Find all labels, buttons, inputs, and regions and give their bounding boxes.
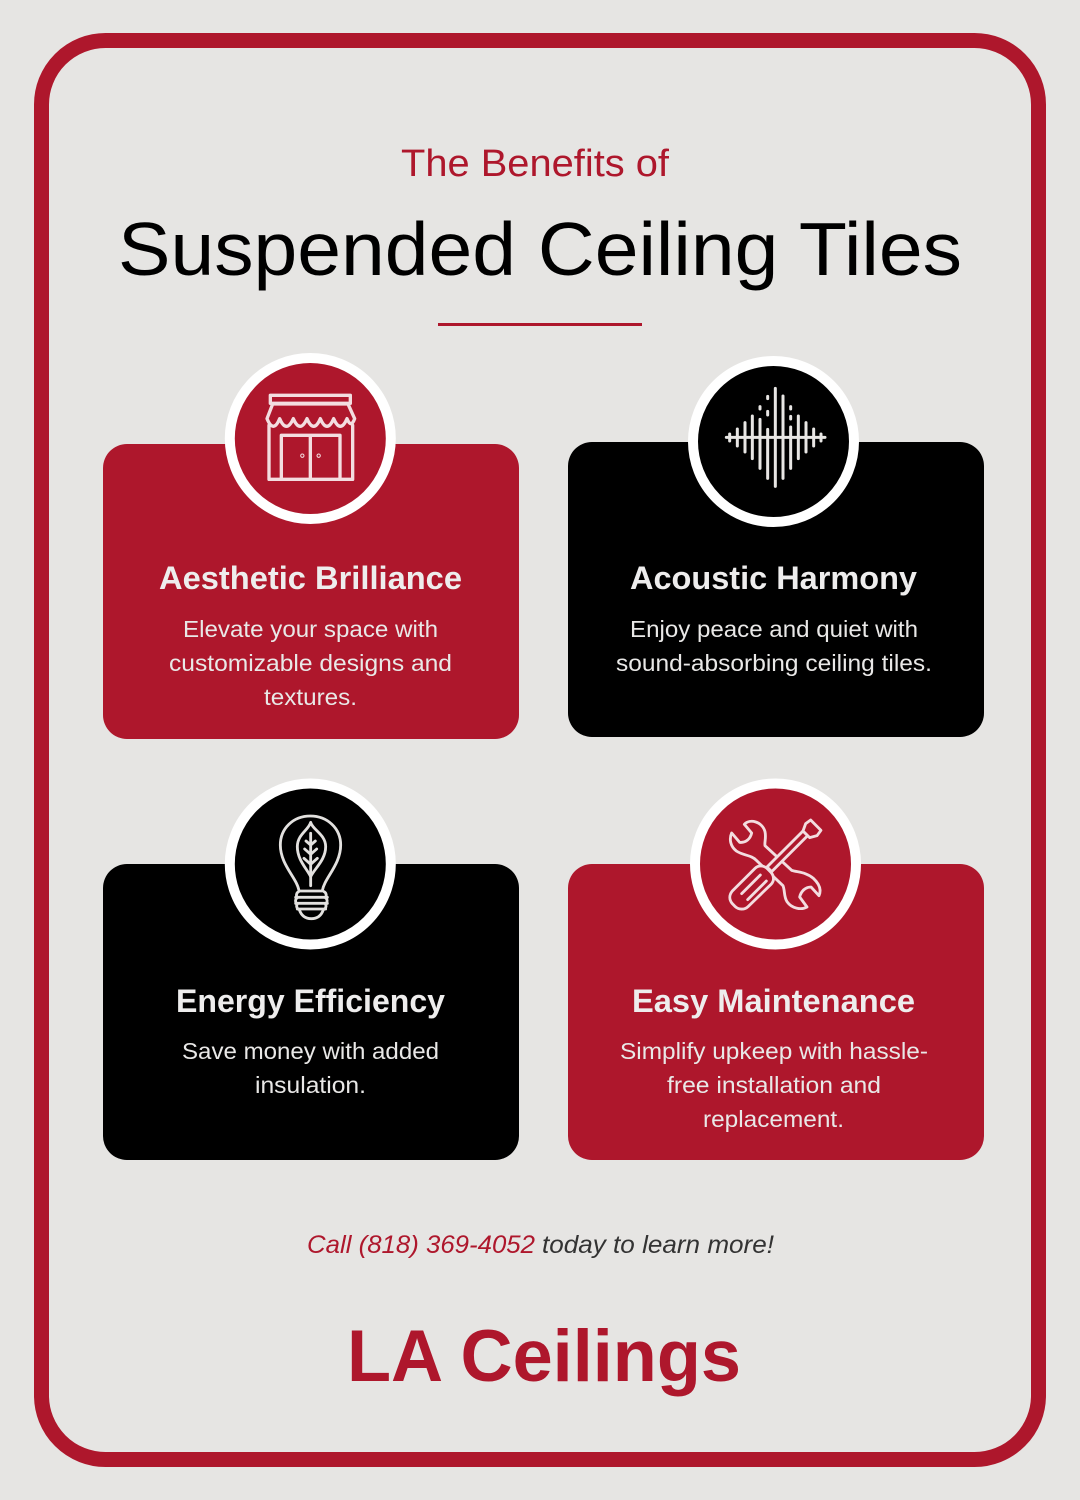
- card text: [616, 616, 932, 676]
- card text: Save money with added: [182, 1038, 439, 1064]
- card heading: Acoustic Harmony: [630, 560, 917, 596]
- card text: sound-absorbing ceiling tiles.: [616, 650, 932, 676]
- card heading: Energy Efficiency: [176, 983, 445, 1019]
- card text: [620, 1038, 928, 1132]
- title: suspended ceiling tiles: Suspended Ceiling Tiles: [118, 207, 962, 291]
- icon: sound wave: [693, 361, 854, 522]
- card text: free installation and: [667, 1072, 881, 1098]
- card background: [103, 444, 519, 739]
- panel: easy maintenance: [568, 784, 984, 1160]
- card text: [182, 1038, 439, 1098]
- heading: the benefits of: The Benefits of: [401, 143, 669, 185]
- card text: customizable designs and: [169, 650, 452, 676]
- card text: Elevate your space with: [183, 616, 438, 642]
- card text: textures.: [264, 684, 357, 710]
- icon: storefront: [230, 358, 391, 519]
- card text: insulation.: [255, 1072, 366, 1098]
- panel: aesthetic brilliance: [103, 358, 519, 739]
- panel: acoustic harmony: [568, 361, 984, 737]
- call to action: [307, 1231, 774, 1259]
- card heading: Aesthetic Brilliance: [159, 560, 462, 596]
- title underline: [438, 323, 642, 326]
- card heading: Easy Maintenance: [632, 983, 915, 1019]
- icon: wrench and screwdriver: [695, 784, 856, 944]
- card text: Enjoy peace and quiet with: [630, 616, 918, 642]
- card background: [103, 864, 519, 1160]
- card background: [568, 864, 984, 1160]
- card text: [169, 616, 452, 710]
- card text: Simplify upkeep with hassle-: [620, 1038, 928, 1064]
- logo: la ceilings: LA Ceilings: [347, 1316, 741, 1397]
- call to action: Call (818) 369-4052: [307, 1231, 535, 1259]
- call to action: today to learn more!: [542, 1231, 774, 1259]
- card text: replacement.: [703, 1106, 844, 1132]
- card background: [568, 442, 984, 737]
- panel: energy efficiency: [103, 784, 519, 1160]
- icon: eco light bulb: [230, 784, 391, 944]
